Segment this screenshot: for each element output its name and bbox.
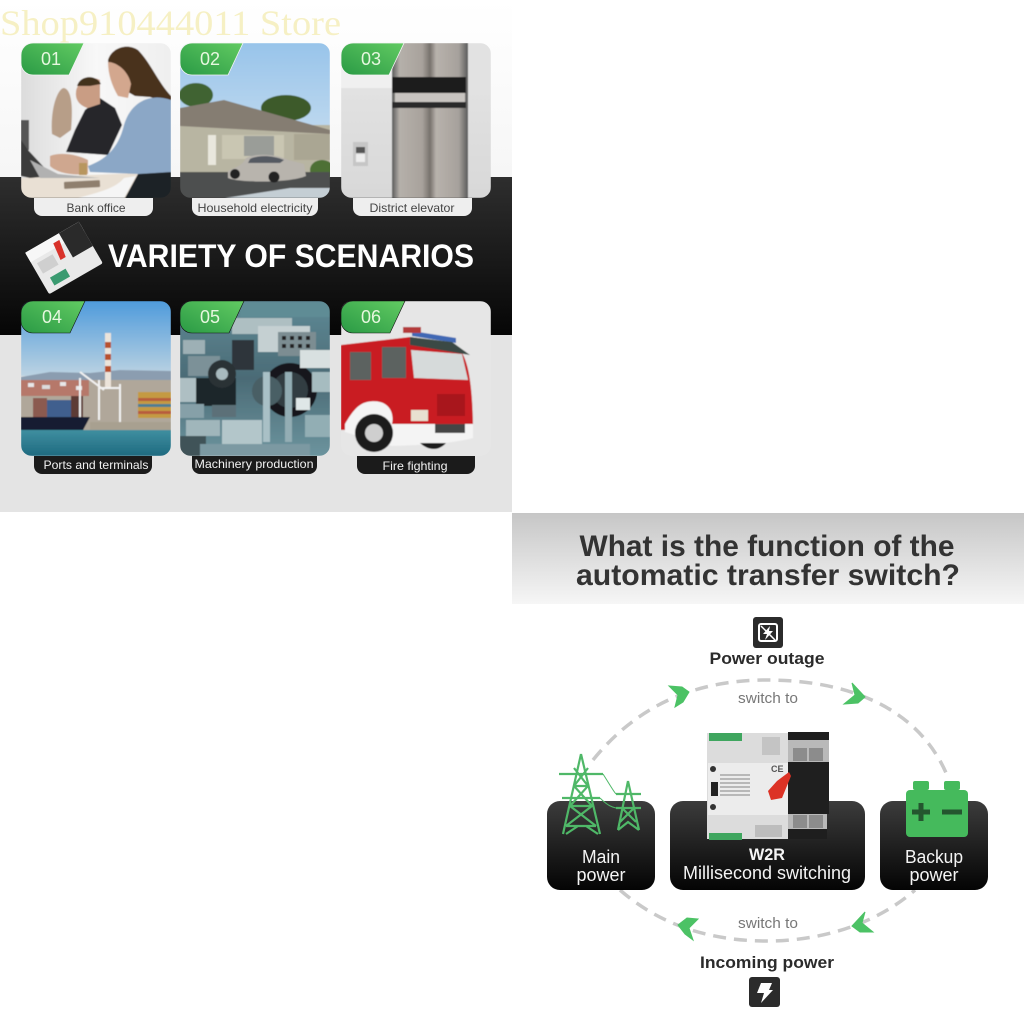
panel background: dark band [0,177,512,335]
tab: 02: 02 [200,49,220,69]
panel background: light top [0,0,512,177]
tab: 03 [341,43,404,75]
caption: district elevator: District elevator [370,201,455,215]
label: switch to (top): switch to [738,690,798,707]
box: W2R millisecond switching [670,801,865,890]
box: backup power: power [910,865,958,885]
caption: ports and terminals: Ports and terminals [44,458,148,472]
caption: district elevator [353,198,472,216]
caption: fire fighting: Fire fighting [382,459,448,473]
caption: bank office [34,198,153,216]
header band: automatic transfer switch? [576,559,960,592]
tab: 01 [21,43,84,75]
caption: fire fighting [357,456,475,474]
icon: transmission towers [559,754,641,834]
icon: incoming power bolt [749,977,780,1007]
tab: 01: 01 [41,49,61,69]
box: backup power: Backup [905,847,963,867]
label: switch to (bottom): switch to [738,915,798,932]
tab: 06 [341,301,405,333]
tab: 05 [180,301,244,333]
tab: 04 [21,301,85,333]
arrow: bottom left [678,918,698,940]
header band: What is the function of the [580,530,954,563]
arrow: bottom right [852,912,873,932]
header band [512,513,1024,604]
product image: transfer switch in title [25,222,103,294]
card 01: bank office [21,43,171,216]
panel: automatic transfer switch function [512,513,1024,1007]
tab: 05: 05 [200,307,220,327]
card 04: ports and terminals [21,301,171,474]
box: main power: Main [582,847,620,867]
icon: power outage [753,617,783,648]
icon: battery [906,781,968,837]
photo: fire truck [341,301,491,456]
photo: elevator door [341,43,491,198]
panel: variety of scenarios [0,0,512,512]
box: main power: power [576,865,626,885]
arrow: top right [844,683,865,704]
photo: container port [21,301,171,456]
card 02: household electricity [179,43,334,216]
tab: 04: 04 [42,307,62,327]
photo: office workers [21,43,171,198]
caption: machinery production: Machinery production [194,457,314,471]
tab: 06: 06 [361,307,381,327]
dashed arc: top [593,680,947,775]
card 06: fire fighting [341,301,491,474]
title: variety of scenarios: VARIETY OF SCENARIOS [108,238,474,274]
panel background: grey bottom [0,335,512,512]
caption: household electricity [192,198,318,216]
caption: ports and terminals [34,456,152,474]
card 03: district elevator [341,43,491,216]
box: W2R millisecond switching: Millisecond switching [683,863,851,883]
tab: 03: 03 [361,49,381,69]
card 05: machinery production [180,301,330,474]
caption: bank office: Bank office [66,201,126,215]
caption: household electricity: Household electricity [198,201,312,215]
tab: 02 [180,43,243,75]
product image: W2R transfer switch: CE [771,764,784,774]
watermark: store name: Shop910444011 Store [0,3,341,43]
label: incoming power: Incoming power [700,953,834,972]
product image: W2R transfer switch [707,732,829,840]
photo: house with car [179,43,334,198]
dashed arc: bottom [620,890,915,941]
photo: machinery [180,301,330,456]
box: backup power [880,801,988,890]
label: power outage: Power outage [710,649,824,668]
box: main power [547,801,655,890]
arrow: top left [669,686,689,707]
box: W2R millisecond switching: W2R [749,845,785,864]
